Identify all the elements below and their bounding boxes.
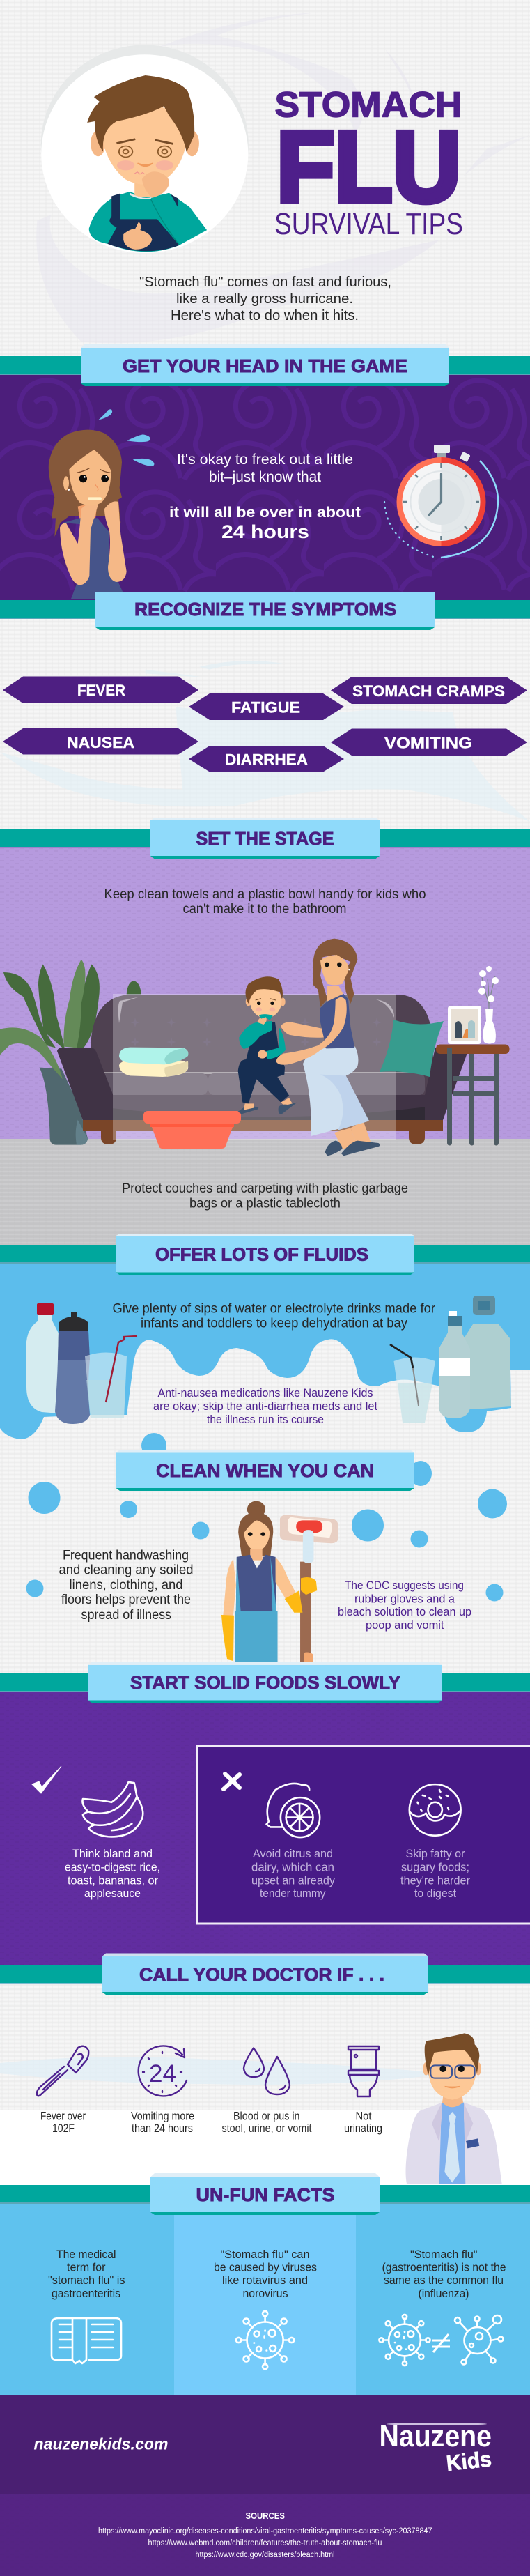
text: avoid citrus: upset an already [251, 1873, 335, 1887]
text: think bland: easy-to-digest: rice, [65, 1861, 160, 1873]
title: SURVIVAL TIPS [274, 207, 463, 241]
text: skip fatty: Skip fatty or [405, 1847, 465, 1860]
panel: symptoms [3, 676, 527, 772]
text: frequent handwashing: spread of illness [81, 1608, 171, 1623]
text: protect couches [122, 1181, 408, 1211]
text: think bland: Think bland and [72, 1847, 153, 1860]
banner: set the stage [0, 818, 530, 859]
swirl: symptoms background [0, 661, 530, 822]
hair and head [247, 1501, 265, 1517]
text: anti-nausea medications: the illness run its course [207, 1413, 324, 1426]
illustration: mother on sofa [276, 939, 380, 1156]
circle backdrop [41, 45, 249, 245]
text: skip fatty: sugary foods; [401, 1861, 469, 1873]
icon: book [52, 2318, 121, 2363]
text: protect couches: Protect couches and carpeting with plastic garbage [122, 1181, 408, 1196]
icon: x mark [224, 1774, 240, 1789]
text: vomiting more [131, 2109, 194, 2135]
text: not the flu: (influenza) [418, 2287, 469, 2300]
panel: get your head in the game [0, 375, 530, 601]
floor [0, 1139, 530, 1246]
text: skip fatty [400, 1847, 470, 1900]
illustration: cleaning woman with mop [221, 1501, 338, 1662]
text: not the flu [382, 2248, 506, 2300]
text: think bland: applesauce [84, 1887, 141, 1900]
text: cdc suggestion: bleach solution to clean up [338, 1605, 471, 1618]
intro text: like a really gross hurricane. [176, 291, 353, 307]
icon: donut [410, 1784, 461, 1836]
text: blood or pus: Blood or pus in [233, 2109, 299, 2123]
title [274, 85, 463, 241]
boy hair [87, 75, 194, 152]
banner: set the stage: SET THE STAGE [196, 828, 334, 849]
illustration: sick boy in circle [41, 45, 249, 253]
text: towels: Keep clean towels and a plastic bowl handy for kids who [104, 887, 426, 902]
text: not the flu: (gastroenteritis) is not the [382, 2261, 506, 2274]
illustration: side table [436, 966, 510, 1146]
illustration: plant [0, 960, 141, 1145]
text: sips of water [113, 1302, 436, 1331]
text: blood or pus [221, 2109, 312, 2135]
text: think bland [65, 1847, 160, 1900]
boy lower hand [123, 222, 152, 250]
boy head [91, 130, 105, 156]
intro text: Here's what to do when it hits. [171, 308, 359, 323]
icon: lemon [266, 1784, 320, 1837]
text: frequent handwashing [59, 1549, 194, 1623]
boy neck and collar [134, 179, 152, 197]
symptom: stomach cramps [331, 677, 527, 704]
text: viruses: norovirus [242, 2287, 288, 2300]
text: cdc suggestion: poop and vomit [366, 1618, 444, 1632]
text: not urinating: urinating [344, 2122, 382, 2135]
icon: droplets [244, 2048, 290, 2094]
panel: call your doctor [0, 2033, 530, 2186]
background swirl: header [36, 13, 530, 343]
mop [280, 1515, 338, 1543]
text: towels [104, 887, 426, 917]
banner: recognize the symptoms [0, 592, 530, 630]
intro text [139, 275, 391, 323]
panel: un-fun facts [0, 2203, 530, 2395]
text: frequent handwashing: Frequent handwashing [63, 1549, 189, 1563]
symptom: diarrhea: DIARRHEA [225, 751, 308, 768]
text: avoid citrus: Avoid citrus and [253, 1847, 333, 1860]
symptom: nausea [3, 728, 198, 754]
text: freak out: 24 hours [221, 521, 309, 542]
top and apron [236, 1555, 276, 1611]
text: frequent handwashing: and cleaning any soiled [59, 1563, 194, 1578]
text: freak out: It's okay to freak out a little [177, 452, 353, 468]
banner: un-fun facts: UN-FUN FACTS [196, 2184, 334, 2205]
symptom: fever: FEVER [77, 682, 125, 699]
icon: 24 hour clock: 24 [149, 2060, 176, 2087]
blue wave backdrop [0, 1263, 530, 1439]
illustration: pillow [380, 1020, 444, 1077]
text: medical term: The medical [56, 2248, 116, 2261]
icon: virus not equal flu [379, 2315, 503, 2366]
icon: toilet [348, 2046, 379, 2096]
text: anti-nausea medications: are okay; skip the anti-diarrhea meds and let [153, 1400, 377, 1413]
text: cdc suggestion: rubber gloves and a [354, 1592, 455, 1606]
text: viruses: "Stomach flu" can [220, 2248, 309, 2261]
symptom: fatigue [189, 693, 344, 720]
banner: offer lots of fluids: OFFER LOTS OF FLUIDS [155, 1243, 368, 1264]
boy sweater [89, 192, 207, 252]
text: medical term: "stomach flu" is [48, 2274, 125, 2287]
symptom: stomach cramps: STOMACH CRAMPS [352, 682, 505, 700]
boy eyes [116, 139, 173, 157]
footer: sources: https://www.webmd.com/children/features/the-truth-about-stomach-flu [148, 2539, 382, 2547]
white floor [0, 2110, 530, 2186]
text: viruses: be caused by viruses [214, 2261, 317, 2274]
text: skip fatty: they're harder [400, 1873, 470, 1887]
text: protect couches: bags or a plastic tablecloth [189, 1196, 341, 1211]
boy overalls [107, 194, 179, 251]
droplets: clean section [26, 1433, 507, 1602]
text: freak out: bit–just know that [209, 469, 321, 485]
banner: call your doctor: CALL YOUR DOCTOR IF . . . [139, 1964, 384, 1985]
panel: offer lots of fluids [0, 1263, 530, 1439]
symptom: diarrhea [189, 746, 344, 772]
panel: set the stage [0, 848, 530, 1246]
icon: 24 hour clock [139, 2046, 187, 2096]
text: frequent handwashing: floors helps prevent the [61, 1593, 191, 1607]
stopwatch [384, 445, 498, 558]
text: avoid citrus: tender tummy [260, 1887, 326, 1900]
icon: check mark [32, 1766, 61, 1793]
website: nauzenekids.com [33, 2435, 169, 2453]
logo: nauzene kids: Nauzene [379, 2419, 492, 2453]
text: freak out: it will all be over in about [169, 505, 361, 521]
text: not the flu: "Stomach flu" [410, 2248, 478, 2261]
text: viruses: like rotavirus and [222, 2274, 308, 2287]
text: not urinating: Not [355, 2109, 372, 2123]
wall [0, 848, 530, 1139]
banner: clean when you can: CLEAN WHEN YOU CAN [156, 1460, 374, 1481]
text: towels: can't make it to the bathroom [182, 902, 347, 917]
text: medical term: term for [67, 2261, 106, 2274]
text: not the flu: same as the common flu [384, 2274, 504, 2287]
banner: get your head in the game [0, 344, 530, 386]
banner: start solid foods slowly: START SOLID FOODS SLOWLY [130, 1672, 400, 1693]
text: avoid citrus: dairy, which can [251, 1861, 334, 1873]
text: think bland: toast, bananas, or [68, 1873, 158, 1887]
illustration: bowl [143, 1111, 241, 1149]
sweat drops [98, 409, 154, 466]
logo: nauzene kids: Kids [445, 2446, 492, 2476]
text: anti-nausea medications: Anti-nausea medications like Nauzene Kids [157, 1386, 373, 1400]
text: vomiting more: Vomiting more [131, 2109, 194, 2123]
pale swirl [0, 2057, 446, 2085]
text: sips of water: Give plenty of sips of water or electrolyte drinks made for [113, 1302, 436, 1316]
text: fever [40, 2109, 86, 2135]
panel: start solid foods slowly [0, 1692, 530, 1965]
arms and gloves [223, 1559, 236, 1616]
footer: sources: https://www.cdc.gov/disasters/bleach.html [195, 2551, 334, 2559]
text: not urinating [344, 2109, 382, 2135]
footer: brand [0, 2395, 530, 2494]
intro text: "Stomach flu" comes on fast and furious, [139, 275, 391, 290]
text: fever: 102F [52, 2122, 75, 2135]
box: foods to avoid [198, 1746, 530, 1924]
footer: sources [0, 2494, 530, 2576]
symptom: vomiting [331, 729, 527, 756]
text: vomiting more: than 24 hours [132, 2122, 193, 2135]
text: cdc suggestion: The CDC suggests using [345, 1579, 464, 1592]
footer: sources: SOURCES [245, 2510, 285, 2521]
footer: sources: https://www.mayoclinic.org/diseases-conditions/viral-gastroenteritis/symptoms-causes/syc-20378847 [98, 2527, 432, 2536]
illustration: boy on sofa [238, 976, 297, 1114]
illustration: worried woman [49, 430, 127, 599]
icon: bananas [82, 1782, 143, 1837]
text: anti-nausea medications [153, 1386, 377, 1426]
logo: nauzene kids [379, 2419, 492, 2476]
boy raised hand [142, 171, 169, 198]
banner: get your head in the game: GET YOUR HEAD IN THE GAME [123, 355, 407, 376]
illustration: towels [119, 1048, 188, 1077]
banner: un-fun facts [0, 2173, 530, 2215]
text: cdc suggestion [338, 1579, 471, 1632]
text: fever: Fever over [40, 2109, 86, 2123]
illustration: doctor [405, 2033, 502, 2184]
text: medical term [48, 2248, 125, 2300]
symptom: fever [3, 676, 198, 703]
title: FLU [276, 111, 461, 223]
text: frequent handwashing: linens, clothing, and [70, 1578, 182, 1593]
illustration: right bottles and glass [390, 1296, 511, 1423]
icon: virus [236, 2311, 294, 2369]
symptom: fatigue: FATIGUE [231, 698, 300, 716]
banner: call your doctor [0, 1953, 530, 1995]
title: STOMACH [274, 85, 462, 124]
text: sips of water: infants and toddlers to keep dehydration at bay [141, 1316, 407, 1331]
text: freak out [169, 452, 361, 542]
text: viruses [214, 2248, 317, 2300]
text: blood or pus: stool, urine, or vomit [221, 2122, 312, 2135]
text: skip fatty: to digest [414, 1887, 456, 1900]
text: avoid citrus [251, 1847, 335, 1900]
banner: start solid foods slowly [0, 1662, 530, 1703]
symptom: nausea: NAUSEA [67, 734, 134, 751]
illustration: left bottles and glass [26, 1303, 137, 1424]
illustration: sofa [57, 994, 468, 1144]
banner: recognize the symptoms: RECOGNIZE THE SYMPTOMS [134, 599, 396, 620]
symptom: vomiting: VOMITING [384, 735, 472, 751]
text: medical term: gastroenteritis [52, 2287, 120, 2300]
banner: clean when you can [116, 1450, 414, 1491]
banner: offer lots of fluids [0, 1234, 530, 1275]
icon: thermometer [37, 2046, 88, 2096]
